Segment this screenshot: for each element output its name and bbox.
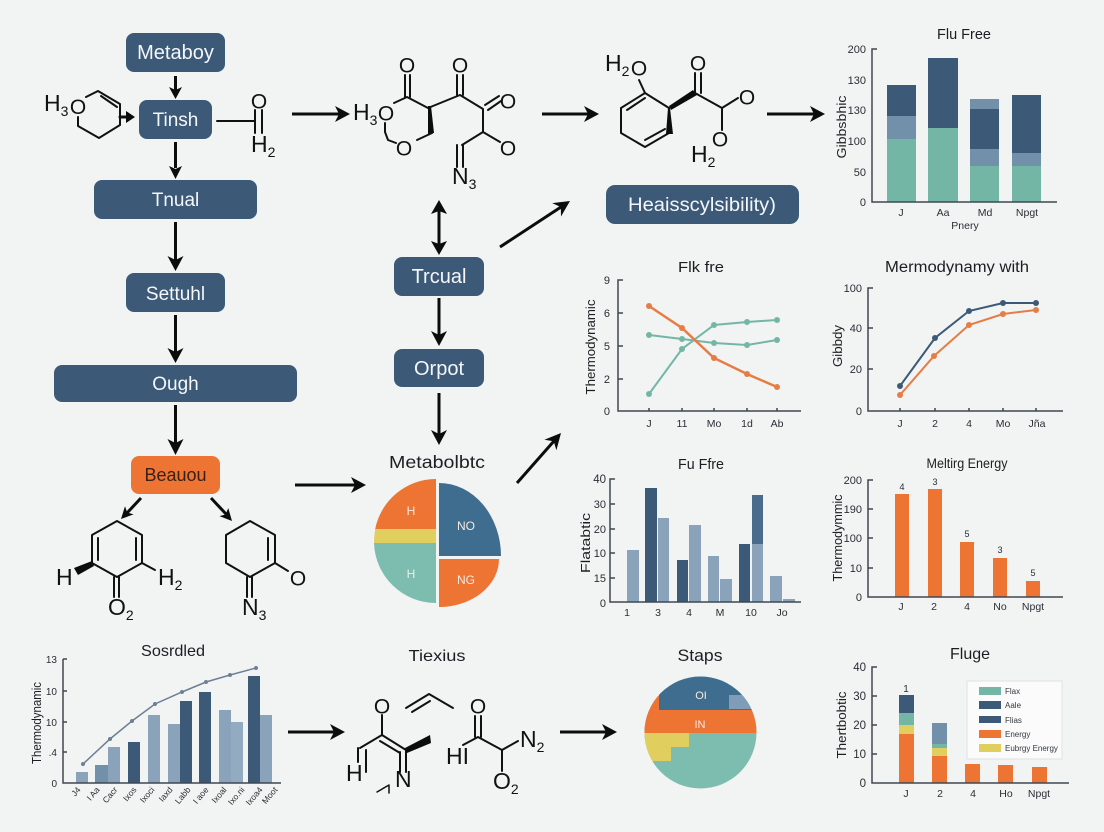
chart: Flu Free stacked bars: J [898,207,904,219]
chart: Meltirg Energy orange bars: 100 [844,533,862,545]
chart: Sosrdled bars with line: Ixoci [138,785,157,805]
box: Metaboy: Metaboy [137,42,214,64]
chart: Fluge stacked bars with legend: 30 [853,691,866,703]
pie chart: Staps: IN [694,719,706,731]
chart: Sosrdled bars with line: I Aa [84,785,102,803]
chart: Mermodynamy with line chart: Gibbdy [830,325,845,367]
arrow: to top-right chart [767,106,825,122]
molecule: H2O ring acid: O [712,128,728,152]
chart: Fluge stacked bars with legend: Npgt [1028,788,1050,800]
chart: Sosrdled bars with line: 0 [51,779,57,790]
chart: Sosrdled bars with line: 10 [46,718,57,729]
pie chart: Staps: OI [695,690,707,702]
chart: Flu Free stacked bars: 130 [848,75,866,87]
molecule: H, H2, O2 ring: 2 [175,577,183,593]
chart: Meltirg Energy orange bars: No [993,601,1007,613]
pie chart: Metabolbtc [374,479,501,607]
pie chart: Metabolbtc: NG [457,573,475,587]
box: Heaisscylsibility [606,185,799,224]
chart: Fu Ffre bars: Jo [776,607,788,619]
chart: Fluge stacked bars with legend: Fluge [950,646,990,663]
chart: Sosrdled bars with line: I aoe [191,785,211,806]
chart: Fluge stacked bars with legend: Thertbobtic [834,691,849,758]
arrow: Tnual to Settuhl [168,222,184,271]
chart: Fu Ffre bars: 10 [594,548,606,560]
chart: Flk fre line chart: 9 [604,275,610,287]
chart: Mermodynamy with line chart: 20 [850,364,862,376]
chart: Fluge stacked bars with legend: 4 [970,788,976,800]
box: Orpot: Orpot [414,358,464,380]
molecule: O and H2 fragment: O [251,90,267,114]
chart: Mermodynamy with line chart: Mermodynamy with [885,259,1029,276]
chart: Fluge stacked bars with legend: J [903,788,909,800]
molecule: bottom structures: 2 [511,781,519,797]
chart: Flu Free stacked bars: Npgt [1016,207,1038,219]
molecule: central chain: O [500,138,516,160]
molecule: bottom structures: HI [446,743,469,769]
chart: Meltirg Energy orange bars: 0 [856,592,862,604]
arrow: Trcual to Orpot [431,298,447,346]
box: Tinsh [139,100,212,139]
molecule: bottom structures [346,694,545,797]
molecule: H3O ring: O [70,96,86,119]
molecule: O, N3 ring: N [242,594,259,620]
box: Settuhl [126,273,225,312]
chart: Meltirg Energy orange bars: 4 [964,601,970,613]
chart: Meltirg Energy orange bars: 190 [844,504,862,516]
box: Metaboy [126,33,225,72]
box: Tinsh: Tinsh [153,110,198,131]
molecule: H, H2, O2 ring: H [158,564,175,590]
molecule: O and H2 fragment [217,90,276,160]
pie chart: Staps [644,676,756,788]
chart: Meltirg Energy orange bars: 3 [932,477,938,487]
chart: Sosrdled bars with line: Ixoa4 [244,785,265,807]
legend: Flias [1005,716,1022,725]
chart: Fu Ffre bars: 4 [686,607,692,619]
molecule: bottom structures: N [520,726,537,752]
pie chart: Metabolbtc: NO [457,519,475,533]
chart: Meltirg Energy orange bars: J [898,601,904,613]
molecule: bottom structures: O [374,696,390,718]
box: Tnual [94,180,257,219]
box: Tnual: Tnual [152,190,199,211]
molecule: bottom structures: O [470,696,486,718]
chart: Sosrdled bars with line: Thermodynamic [29,682,44,764]
box: Ough [54,365,297,402]
chart: Fluge stacked bars with legend: 40 [853,662,866,674]
chart: Meltirg Energy orange bars: 5 [964,529,970,539]
chart: Flu Free stacked bars [834,26,1057,232]
chart: Mermodynamy with line chart: Jña [1029,418,1046,430]
chart: Flu Free stacked bars: Pnery [951,220,979,232]
chart: Flu Free stacked bars: Gibbsbhic [834,95,849,159]
molecule: H2O ring acid [605,50,755,170]
arrow: Trcual to top right [500,201,570,247]
chart: Flk fre line chart: 6 [604,308,610,320]
chart: Meltirg Energy orange bars: 4 [899,482,905,492]
chart: Sosrdled bars with line: J4 [69,785,83,798]
chart: Flk fre line chart: Thermodynamic [583,299,598,394]
molecule: O, N3 ring: O [290,568,306,590]
molecule: central chain: O [452,54,468,78]
chart: Sosrdled bars with line: Moot [260,784,280,806]
molecule: H3O ring: H [44,90,61,116]
chart: Meltirg Energy orange bars: Meltirg Energy [926,456,1008,471]
chart: Flk fre line chart: Ab [771,418,784,430]
title: Staps: Staps [678,646,722,665]
arrow: to pie chart [295,477,366,493]
arrow: Orpot to pie [431,393,447,445]
box: Ough: Ough [152,374,199,395]
chart: Meltirg Energy orange bars: Thermodymmic [830,494,845,582]
arrow: Metaboy to Tinsh [169,76,182,99]
chart: Sosrdled bars with line: 13 [46,655,57,666]
chart: Flk fre line chart: 2 [604,374,610,386]
molecule: central chain [353,54,516,192]
chart: Mermodynamy with line chart: 4 [966,418,972,430]
molecule: bottom structures: 2 [537,739,545,755]
molecule: H2O ring acid: O [690,52,706,76]
chart: Sosrdled bars with line: Ixoal [209,785,229,805]
molecule: central chain: N [452,163,469,189]
box: Beauou [131,456,220,494]
chart: Sosrdled bars with line: Cacr [100,785,120,805]
arrow: Beauou to left molecule [121,498,141,519]
chart: Sosrdled bars with line [29,643,281,807]
chart: Flu Free stacked bars: 0 [860,197,866,209]
molecule: H2O ring acid: H [691,141,708,167]
chart: Flu Free stacked bars: Aa [937,207,950,219]
chart: Mermodynamy with line chart: 2 [932,418,938,430]
molecule: H, H2, O2 ring: 2 [126,607,134,623]
molecule: central chain: O [399,54,415,78]
chart: Meltirg Energy orange bars [830,456,1063,613]
chart: Meltirg Energy orange bars: 200 [844,475,862,487]
pie chart: Metabolbtc: H [407,504,415,518]
molecule: bottom structures: N [395,766,412,792]
chart: Fluge stacked bars with legend: 1 [903,684,909,695]
molecule: bottom structures: H [346,760,363,786]
arrow: Ough to Beauou [168,405,184,455]
chart: Flu Free stacked bars: Flu Free [937,26,991,43]
box: Trcual [394,257,484,296]
chart: Fu Ffre bars: 10 [745,607,757,619]
chart: Fluge stacked bars with legend: 2 [937,788,943,800]
chart: Flk fre line chart: Mo [707,418,721,430]
arrow: double-headed vertical [431,200,447,255]
chart: Sosrdled bars with line: Labb [173,785,193,806]
chart: Fu Ffre bars: Flatabtic [578,512,593,573]
chart: Flu Free stacked bars: Md [978,207,992,219]
chart: Flu Free stacked bars: 130 [848,105,866,117]
chart: Fluge stacked bars with legend [834,646,1069,800]
chart: Flu Free stacked bars: 100 [848,136,866,148]
molecule: central chain: O [500,90,516,114]
chart: Flu Free stacked bars: 200 [848,44,866,56]
chart: Fu Ffre bars: 30 [594,499,606,511]
arrow: Beauou to right molecule [211,498,232,521]
molecule: central chain: H [353,99,370,125]
chart: Mermodynamy with line chart: 40 [850,323,862,335]
chart: Flk fre line chart: 11 [677,418,688,430]
chart: Mermodynamy with line chart: 100 [844,283,862,295]
chart: Fu Ffre bars: 15 [594,573,606,585]
chart: Fluge stacked bars with legend: 0 [860,778,866,790]
molecule: O, N3 ring: 3 [259,607,267,623]
box: Trcual: Trcual [412,266,466,288]
arrow: pie to charts [517,433,561,483]
title: Tiexius: Tiexius [408,648,466,665]
chart: Mermodynamy with line chart: Mo [996,418,1010,430]
chart: Fu Ffre bars [578,456,801,619]
molecule: bottom structures: O [493,768,511,794]
legend: Aale [1005,701,1022,710]
chart: Meltirg Energy orange bars: 10 [850,563,862,575]
chart: Sosrdled bars with line: .4 [49,748,57,759]
pie chart: Metabolbtc: H [407,567,415,581]
arrow: to central molecule [292,106,350,122]
molecule: H, H2, O2 ring [56,521,183,623]
chart: Sosrdled bars with line: Sosrdled [141,643,205,660]
chart: Flu Free stacked bars: 50 [854,167,866,179]
chart: Flk fre line chart: Flk fre [678,259,724,276]
box: Settuhl: Settuhl [146,284,205,305]
chart: Flk fre line chart: 0 [604,406,610,418]
box: Beauou: Beauou [144,465,207,485]
chart: Fu Ffre bars: 20 [594,524,606,536]
chart: Mermodynamy with line chart: 0 [856,406,862,418]
molecule: H2O ring acid: O [739,86,755,110]
arrow: bottom chart to molecule [288,724,345,740]
chart: Flk fre line chart: 1d [741,418,753,430]
molecule: central chain: 3 [469,176,477,192]
chart: Sosrdled bars with line: Iaxd [157,785,175,804]
molecule: O and H2 fragment: 2 [268,144,276,160]
arrow: Tinsh to Tnual [169,142,182,179]
chart: Flk fre line chart: 5 [604,341,610,353]
chart: Fu Ffre bars: 3 [655,607,661,619]
legend: Flax [1005,687,1020,696]
legend: Eubrgy Energy [1005,744,1058,753]
chart: Flk fre line chart [583,259,801,430]
molecule: central chain: O [396,138,412,160]
molecule: H2O ring acid: 2 [622,63,630,79]
chart: Flk fre line chart: J [646,418,652,430]
molecule: H2O ring acid: O [631,58,647,80]
box: Orpot [394,349,484,387]
molecule: O, N3 ring [226,521,306,623]
chart: Fluge stacked bars with legend: 10 [853,749,866,761]
chart: Sosrdled bars with line: 10 [46,687,57,698]
molecule: O and H2 fragment: H [251,131,268,157]
chart: Sosrdled bars with line: Ixos [121,785,139,803]
molecule: H, H2, O2 ring: H [56,564,73,590]
molecule: H, H2, O2 ring: O [108,594,126,620]
chart: Meltirg Energy orange bars: 3 [997,545,1003,555]
chart: Mermodynamy with line chart [830,259,1063,430]
chart: Fluge stacked bars with legend: Ho [999,788,1013,800]
arrow: molecule to Staps pie [560,724,617,740]
box: Heaisscylsibility: Heaisscylsibility) [628,195,776,216]
chart: Fu Ffre bars: 0 [600,598,606,610]
chart: Fu Ffre bars: Fu Ffre [678,456,724,473]
molecule: H3O ring: 3 [61,103,69,119]
chart: Fu Ffre bars: M [716,607,724,619]
chart: Fu Ffre bars: 1 [624,607,630,619]
molecule: H2O ring acid: H [605,50,622,76]
title: Metabolbtc: Metabolbtc [389,452,485,472]
chart: Sosrdled bars with line: Ixo.ni [226,785,247,807]
chart: Meltirg Energy orange bars: Npgt [1022,601,1044,613]
molecule: central chain: 3 [370,112,378,128]
arrow: to benzene molecule [542,106,599,122]
legend [967,681,1062,759]
arrow: Settuhl to Ough [168,315,184,363]
molecule: central chain: O [378,102,394,126]
chart: Meltirg Energy orange bars: 5 [1030,568,1036,578]
molecule: H3O ring [44,90,135,138]
chart: Fu Ffre bars: 40 [593,474,606,486]
chart: Meltirg Energy orange bars: 2 [931,601,937,613]
chart: Fluge stacked bars with legend: 20 [853,720,866,732]
chart: Mermodynamy with line chart: J [897,418,903,430]
molecule: H2O ring acid: 2 [708,154,716,170]
legend: Energy [1005,730,1030,739]
